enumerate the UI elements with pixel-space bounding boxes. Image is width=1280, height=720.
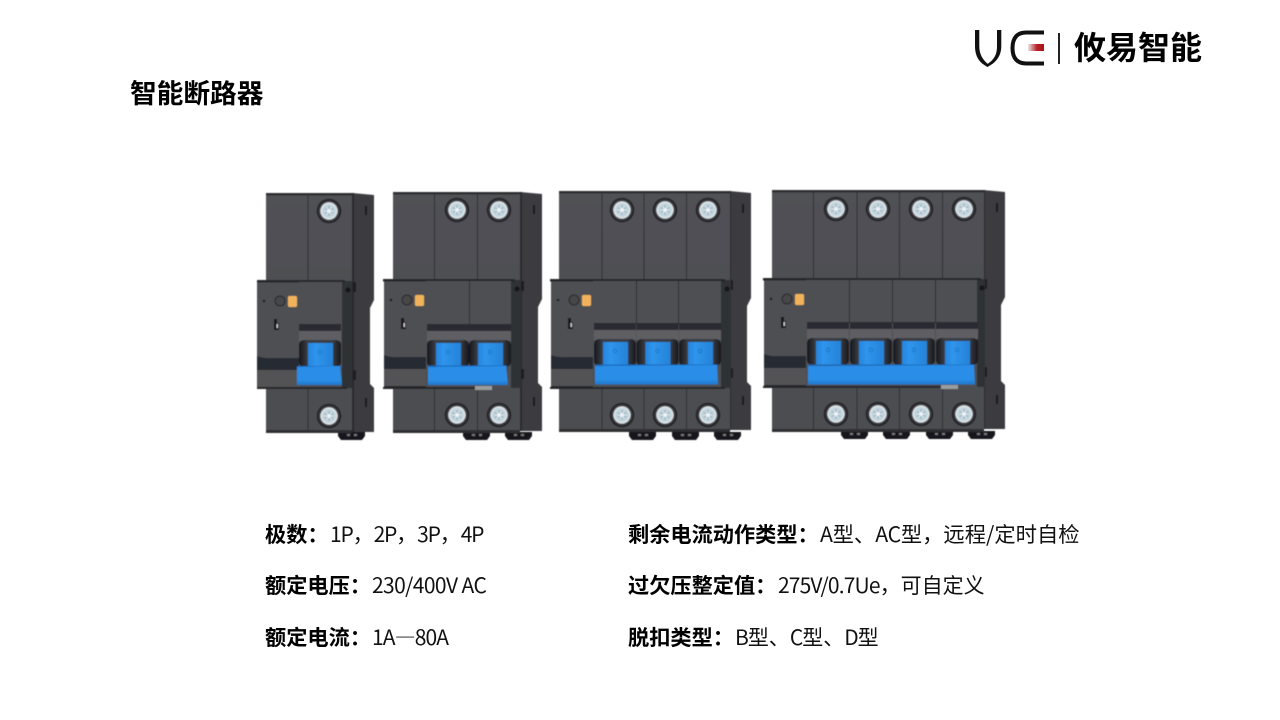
spec: trip type: B型、C型、D型: [735, 622, 879, 652]
spec: rated current: 额定电流：: [265, 621, 371, 652]
spec: poles: [265, 518, 484, 549]
spec: over/under voltage setting: [628, 569, 985, 600]
title: 智能断路器: [130, 72, 263, 111]
spec: over/under voltage setting: 过欠压整定值：: [628, 569, 776, 600]
breaker 1P: [257, 193, 374, 440]
spec: poles: 极数：: [265, 518, 329, 549]
breaker 3P: [550, 191, 751, 440]
logo: [975, 23, 1202, 69]
breaker 2P: [383, 192, 542, 440]
spec: residual current type: 剩余电流动作类型：: [628, 518, 819, 549]
spec: poles: 1P，2P，3P，4P: [330, 519, 483, 549]
spec: trip type: 脱扣类型：: [628, 621, 734, 652]
spec: residual current type: [628, 518, 1080, 549]
spec: rated current: [265, 621, 449, 652]
logo: 攸易智能: [1074, 23, 1202, 69]
spec: residual current type: A型、AC型，远程/定时自检: [820, 518, 1080, 549]
spec: rated voltage: [265, 569, 486, 600]
spec: rated voltage: 额定电压：: [265, 569, 371, 600]
spec: over/under voltage setting: 275V/0.7Ue，可自定义: [778, 570, 985, 600]
spec: trip type: [628, 621, 879, 652]
breaker 4P: [763, 190, 1005, 439]
spec: rated current: 1A—80A: [372, 622, 448, 652]
spec: rated voltage: 230/400V AC: [372, 570, 486, 600]
